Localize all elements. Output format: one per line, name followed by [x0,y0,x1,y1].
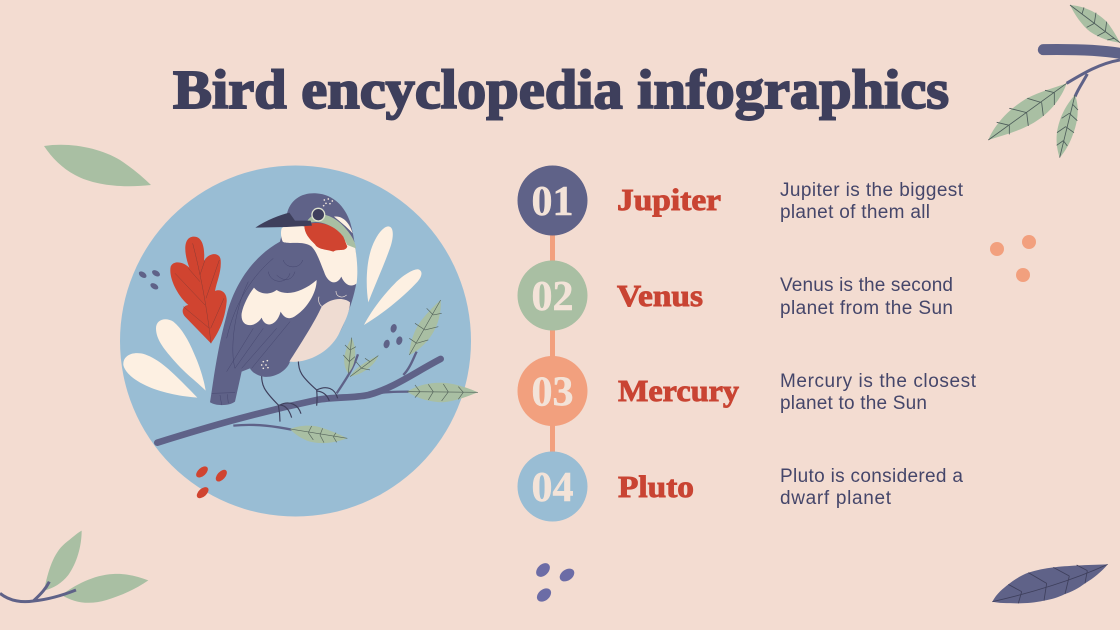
description Mercury [780,371,977,414]
branch leaves [290,300,478,443]
description Mercury: planet to the Sun [780,393,927,414]
item 2: Venus [518,260,953,330]
illustration: bird on a branch in blue circle [120,166,478,516]
heading Pluto: Pluto [618,469,694,504]
decorative branch: top right [988,5,1120,158]
branch [157,352,441,443]
decorative leaf: top left [44,145,151,186]
red dots [194,464,229,500]
description Pluto: dwarf planet [780,488,892,509]
title: Bird encyclopedia infographics [173,59,949,120]
bird [210,193,357,422]
blue circle [120,166,471,516]
connector line [550,200,555,486]
description Mercury: Mercury is the closest [780,371,977,392]
description Venus: Venus is the second [780,275,953,296]
number badge 02 [518,260,588,330]
slate dots [138,269,403,349]
decorative leaf: bottom right [992,564,1108,603]
description Jupiter: Jupiter is the biggest [780,180,964,201]
decorative branch: bottom left [0,531,148,603]
number badge 03: 03 [532,370,574,416]
green collar [307,214,356,248]
description Pluto: Pluto is considered a [780,466,963,487]
heading Venus: Venus [617,278,703,313]
wing white patch [242,280,317,325]
number badge 04 [518,452,588,522]
white chest [281,225,357,286]
red leaf [170,237,227,343]
description Jupiter: planet of them all [780,202,930,223]
beak [255,213,312,228]
number badge 01 [518,166,588,236]
description Venus: planet from the Sun [780,298,953,319]
legs [262,360,338,422]
belly [289,299,350,362]
eye [311,208,325,222]
number badge 01: 01 [532,179,574,225]
head stripe [334,216,353,233]
item 4: Pluto [518,452,963,522]
item 1: Jupiter [518,166,964,236]
number badge 04: 04 [532,465,574,511]
red throat [304,223,347,252]
decorative dots: salmon [990,235,1036,282]
number badge 03 [518,356,588,426]
heading Jupiter: Jupiter [617,182,721,217]
description Jupiter [780,180,964,223]
description Venus [780,275,953,319]
description Pluto [780,466,963,509]
wing scallop lines [212,258,303,405]
body [210,193,357,405]
feather marks [319,291,347,306]
number badge 02: 02 [532,274,574,320]
cream leaves [123,226,422,398]
heading Mercury: Mercury [618,373,740,408]
item 3: Mercury [518,356,977,426]
decorative dots: purple [533,560,577,604]
